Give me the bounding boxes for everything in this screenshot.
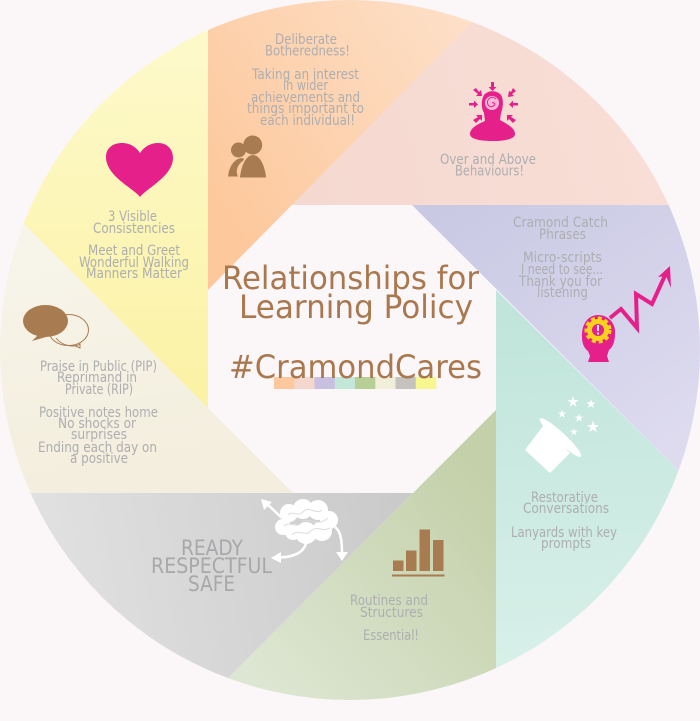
text: deliberate botheredness: achievements and [251,90,360,106]
text: three visible consistencies: Manners Matter [86,266,182,282]
text: three visible consistencies [79,209,189,282]
title: #CramondCares [229,348,482,386]
text: praise in public: surprises [71,427,127,443]
text: deliberate botheredness: Taking an interest [251,67,359,83]
text: restorative conversations: Lanyards with key [511,525,617,541]
text: cramond catch phrases: Thank you for [518,274,602,290]
icon: speech bubbles [23,305,88,348]
title: Learning Policy [239,288,473,326]
title [222,259,482,386]
text: ready respectful safe [151,536,272,596]
icon: brain with arrows [261,499,348,563]
text: ready respectful safe: RESPECTFUL [151,554,272,578]
panel: teal [496,290,678,668]
text: deliberate botheredness: things important to [247,101,364,117]
text: three visible consistencies: Meet and Greet [88,243,180,259]
icon: magic hat with stars [525,396,599,473]
icon: head with gear and rising arrow [582,266,671,362]
text: cramond catch phrases: Phrases [539,227,586,243]
text: routines and structures: Structures [360,605,423,621]
text: deliberate botheredness: Deliberate [275,32,337,48]
text: deliberate botheredness: each individual! [260,113,355,129]
panel: grey [30,493,413,678]
text: cramond catch phrases: listening [537,285,588,301]
icon: people [228,136,266,178]
text: praise in public: Ending each day on [38,440,157,456]
text: cramond catch phrases: I need to see... [521,262,603,278]
panel: yellow [24,30,208,408]
icon: heart [106,143,173,197]
panel: cream [0,200,293,493]
text: routines and structures: Routines and [350,593,428,609]
colour swatch strip [274,377,436,389]
text: praise in public: Private (RIP) [65,382,133,398]
text: restorative conversations [511,490,617,552]
text: ready respectful safe: SAFE [188,572,235,596]
text: restorative conversations: Conversations [523,501,609,517]
text: over and above: Behaviours! [455,164,524,180]
text: deliberate botheredness: Botheredness! [265,44,350,60]
text: deliberate botheredness: in wider [283,78,328,94]
text: cramond catch phrases [513,215,608,301]
text: cramond catch phrases: Micro-scripts [523,250,602,266]
text: three visible consistencies: Consistencies [93,221,175,237]
text: over and above: Over and Above [440,152,536,168]
panel: lavender [412,205,700,492]
text: restorative conversations: Restorative [531,490,598,506]
panel: peach [292,22,668,205]
text: praise in public: Positive notes home [39,405,158,421]
text: routines and structures: Essential! [363,628,419,644]
text: cramond catch phrases: Cramond Catch [513,215,608,231]
text: praise in public: No shocks or [58,416,136,432]
text: praise in public: a positive [70,451,128,467]
text: praise in public: Reprimand in [57,370,137,386]
text: three visible consistencies: Wonderful Walking [79,255,189,271]
text: praise in public [38,359,158,467]
text: ready respectful safe: READY [181,536,243,560]
text: routines and structures [350,593,428,644]
text: restorative conversations: prompts [541,536,591,552]
panel: orange [208,0,494,290]
text: three visible consistencies: 3 Visible [108,209,157,225]
text: over and above [440,152,536,180]
text: praise in public: Praise in Public (PIP) [40,359,157,375]
icon: bar chart [392,530,444,576]
title: Relationships for [222,259,480,297]
text: deliberate botheredness [247,32,364,129]
panel: green [206,410,496,700]
icon: head with spiral and arrows [469,82,518,141]
